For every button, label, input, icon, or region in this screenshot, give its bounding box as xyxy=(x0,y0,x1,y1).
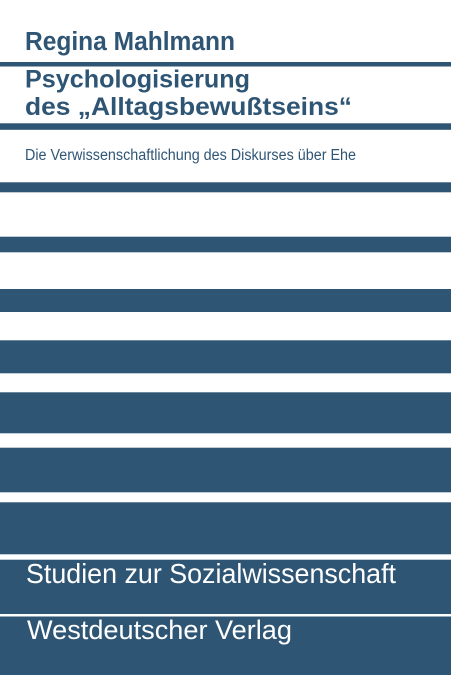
title: des „Alltagsbewußtseins“ xyxy=(25,93,352,121)
author name: Regina Mahlmann xyxy=(25,28,235,56)
series name: Studien zur Sozialwissenschaft xyxy=(26,558,396,589)
title xyxy=(25,66,352,121)
title: Psychologisierung xyxy=(25,66,250,94)
publisher: Westdeutscher Verlag xyxy=(27,615,292,645)
subtitle: Die Verwissenschaftlichung des Diskurses über Ehe xyxy=(25,147,356,164)
